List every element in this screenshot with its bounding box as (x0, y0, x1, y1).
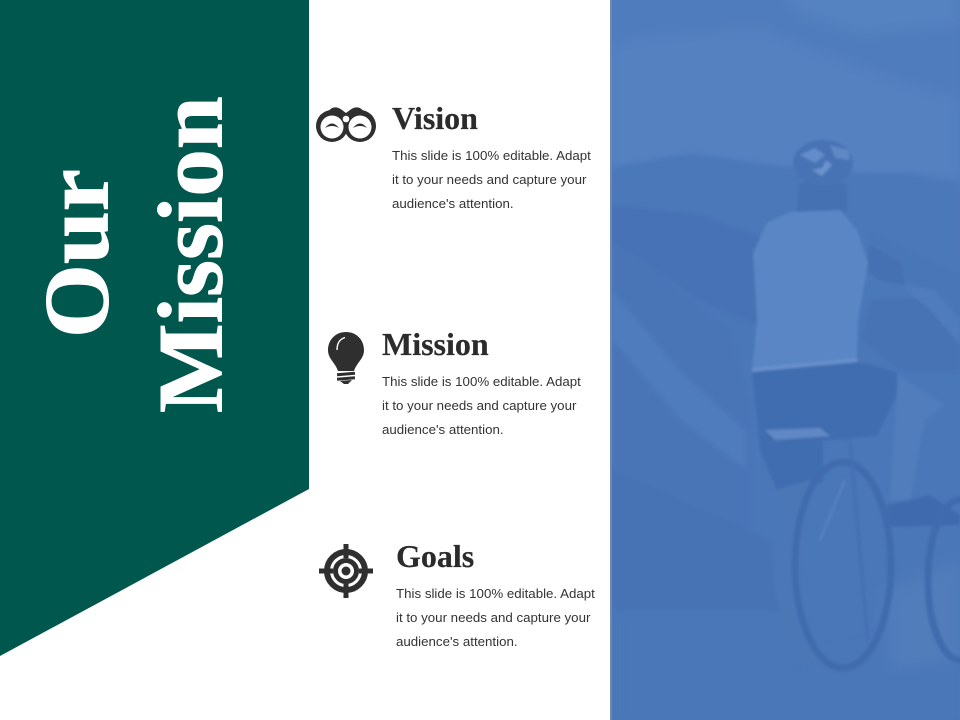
text: mission description (382, 374, 581, 437)
icon: target (319, 544, 373, 598)
title: Our Mission (27, 96, 242, 413)
text: goals description: it to your needs and capture your (396, 610, 591, 625)
panel: green title banner (0, 0, 309, 656)
text: goals description (396, 586, 595, 649)
text: goals description: This slide is 100% editable. Adapt (396, 586, 595, 601)
section: goals (319, 538, 595, 649)
text: vision description: it to your needs and capture your (392, 172, 587, 187)
photo left edge (610, 0, 612, 720)
text: goals description: audience's attention. (396, 634, 518, 649)
heading: Vision: Vision (392, 100, 478, 136)
section: mission (328, 326, 581, 437)
heading: Goals: Goals (396, 538, 474, 574)
text: vision description: audience's attention. (392, 196, 514, 211)
text: vision description (392, 148, 591, 211)
section: vision (316, 100, 591, 211)
heading: Mission: Mission (382, 326, 489, 362)
panel: blue cyclist photo (600, 0, 960, 720)
text: mission description: it to your needs and capture your (382, 398, 577, 413)
icon: binoculars (316, 107, 376, 142)
title: Our Mission: Our (27, 169, 128, 338)
mountains (620, 155, 792, 172)
text: mission description: audience's attention. (382, 422, 504, 437)
text: vision description: This slide is 100% editable. Adapt (392, 148, 591, 163)
title: Our Mission: Mission (141, 96, 242, 413)
cyclist figure (752, 140, 960, 668)
icon: light bulb (328, 332, 364, 384)
text: mission description: This slide is 100% editable. Adapt (382, 374, 581, 389)
